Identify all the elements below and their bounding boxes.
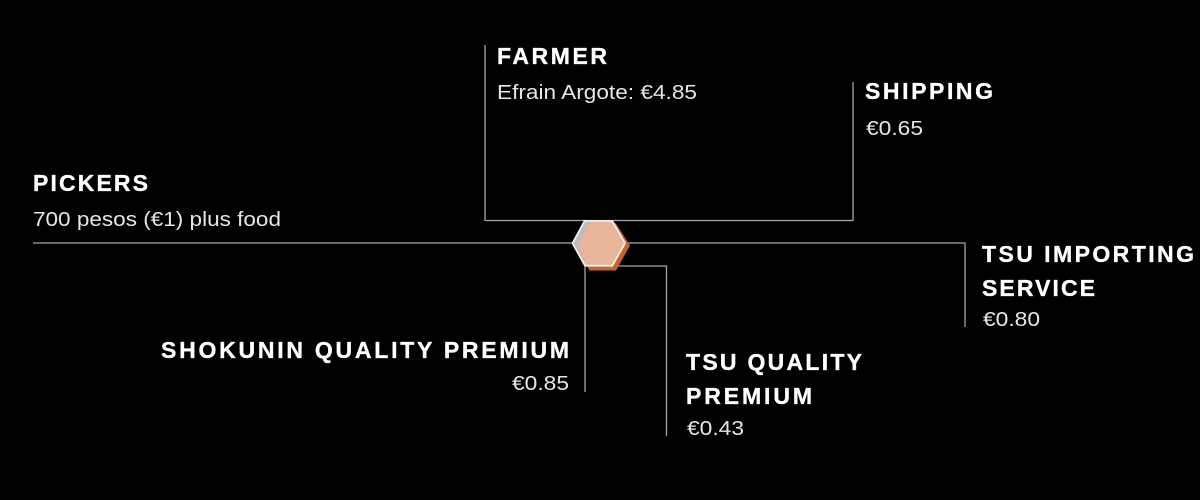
label: Shokunin quality premium: €0.85: [512, 373, 569, 395]
label: pickers: [33, 170, 281, 231]
label: Shokunin quality premium: SHOKUNIN QUALITY PREMIUM: [161, 337, 569, 363]
label: farmer: Efrain Argote: €4.85: [497, 82, 697, 104]
label: TSU quality premium: TSU QUALITY: [686, 349, 862, 375]
label: shipping: €0.65: [866, 118, 923, 140]
label: farmer: [497, 43, 697, 104]
label: shipping: [865, 78, 993, 140]
label: pickers: 700 pesos (€1) plus food: [33, 209, 281, 231]
label: pickers: PICKERS: [33, 170, 148, 196]
label: Shokunin quality premium: [161, 337, 569, 395]
connector: farmer and shipping bracket: [485, 45, 853, 220]
connector: TSU importing service line: [622, 243, 965, 327]
connector: TSU quality premium line: [610, 266, 666, 436]
connector: pickers line: [33, 242, 575, 244]
label: TSU quality premium: PREMIUM: [686, 383, 812, 409]
label: TSU importing service: [982, 241, 1194, 331]
label: TSU importing service: SERVICE: [982, 275, 1095, 301]
label: TSU importing service: €0.80: [983, 309, 1040, 331]
connector: Shokunin premium line: [584, 262, 586, 392]
label: TSU quality premium: €0.43: [687, 418, 744, 440]
label: shipping: SHIPPING: [865, 78, 993, 104]
icon: hexagon: [572, 221, 630, 270]
label: farmer: FARMER: [497, 43, 607, 69]
label: TSU quality premium: [686, 349, 862, 440]
label: TSU importing service: TSU IMPORTING: [982, 241, 1194, 267]
